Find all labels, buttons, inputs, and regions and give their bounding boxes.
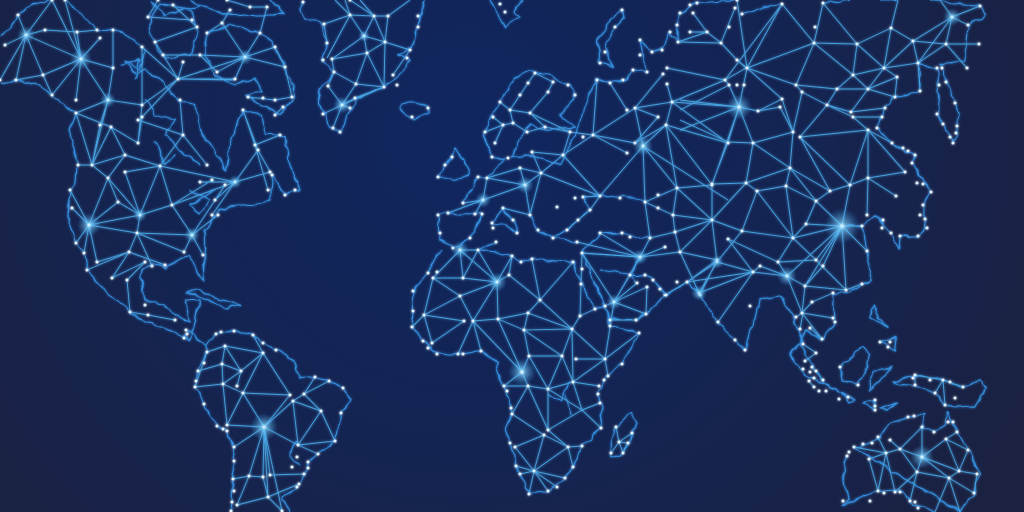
Eurasia: [438, 0, 985, 392]
North America: [0, 0, 300, 340]
Africa and Arabia: [412, 250, 677, 494]
Southeast Asia islands: [839, 305, 987, 410]
Svalbard and Novaya Zemlya: [490, 0, 625, 67]
South America: [184, 330, 351, 511]
Australia: [843, 412, 980, 512]
Greenland and Iceland: [300, 0, 428, 133]
